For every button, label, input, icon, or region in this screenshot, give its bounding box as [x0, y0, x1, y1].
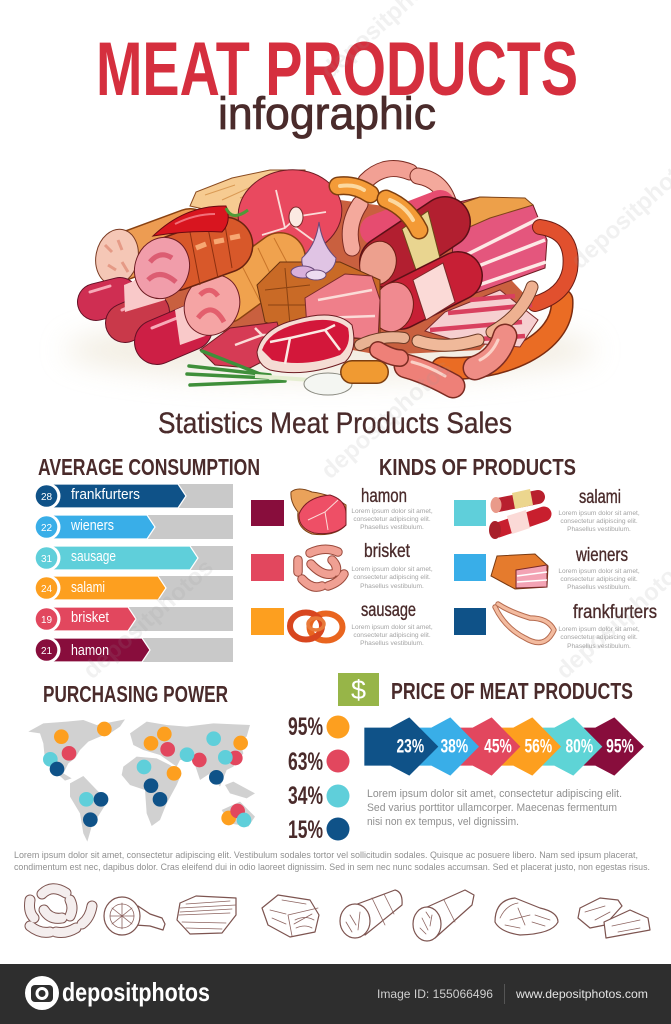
pink steak [233, 163, 347, 263]
price values: 45% [484, 737, 512, 758]
text block: price description: nisi non ex tempus, vel dignissim. [367, 816, 519, 828]
sketch: meat chunk [262, 895, 319, 937]
image id: Image ID: 155066496 [377, 987, 493, 1001]
item: frankfurters: consectetur adipiscing elit. [560, 634, 638, 641]
item: frankfurters [454, 602, 657, 650]
bar: frankfurters: frankfurters [71, 486, 140, 503]
watermark: depositphotos [316, 354, 457, 484]
bar: brisket: brisket [71, 609, 110, 626]
panel: kinds of products legend [251, 486, 657, 650]
map: teal dots [43, 731, 251, 827]
bar: frankfurters [34, 483, 233, 509]
bar: wieners [34, 514, 233, 540]
website: www.depositphotos.com [515, 987, 648, 1001]
icon: dollar sign [338, 673, 379, 706]
sketch: sausage links [30, 889, 92, 932]
bar: salami [34, 575, 233, 601]
item: sausage: Phasellus vestibulum. [360, 640, 424, 647]
front sausages [352, 287, 532, 386]
price values: 95% [606, 737, 634, 758]
red right sausage [535, 227, 571, 304]
bar: sausage [34, 545, 233, 571]
price values: 23% [396, 737, 424, 758]
bar: hamon [34, 637, 233, 663]
item: frankfurters: frankfurters [573, 602, 657, 623]
price values: 56% [524, 737, 552, 758]
legend: purchasing power percentages: 63% [288, 748, 323, 776]
sketch: steak [495, 898, 558, 935]
map: navy dots [50, 762, 224, 827]
bar: hamon: 21 [41, 646, 52, 657]
left orange roll [122, 232, 190, 257]
brisket block [257, 262, 380, 340]
garlic [302, 222, 336, 276]
item: hamon: hamon [361, 486, 407, 507]
item: salami [454, 487, 640, 539]
item: sausage: Lorem ipsum dolor sit amet, [351, 624, 433, 631]
orange sausages [338, 186, 419, 230]
bar: hamon: hamon [71, 642, 109, 659]
bar: sausage: sausage [71, 548, 116, 565]
map: orange dots [54, 722, 248, 825]
sketch: drumsticks [578, 898, 650, 938]
map: red dots [62, 742, 245, 818]
hero illustration: pile of meat products [65, 163, 595, 395]
sketch: salami [413, 890, 474, 941]
sausage 2 [175, 245, 225, 263]
chart: price arrows [364, 717, 644, 776]
icon: depositphotos logo [25, 976, 59, 1010]
legend: purchasing power percentages: 34% [288, 782, 323, 810]
item: salami: Phasellus vestibulum. [567, 526, 631, 533]
back pink sausages [350, 169, 449, 248]
bar: salami: salami [71, 579, 105, 596]
item: brisket [251, 541, 433, 590]
chart: average consumption bars [34, 483, 233, 663]
item: brisket: Lorem ipsum dolor sit amet, [351, 566, 433, 573]
bar: salami: 24 [41, 584, 52, 595]
item: wieners: consectetur adipiscing elit. [560, 576, 638, 583]
legend: purchasing power percentages: 15% [288, 816, 323, 844]
bar: wieners: wieners [70, 517, 114, 534]
text block: paragraph: Lorem ipsum dolor sit amet, consectetur adipiscing elit. Vestibulum sodales tortor vel sollicitudin sodales. Quisque ac posuere libero. Nam sed ipsum placerat, [14, 850, 638, 860]
legend: purchasing power percentages [288, 713, 350, 844]
bar: brisket [34, 606, 233, 632]
title: infographic [218, 88, 436, 139]
text block: price description: Lorem ipsum dolor sit amet, consectetur adipiscing elit. [367, 788, 622, 800]
sketch: salami roll [340, 890, 402, 938]
rear steak [200, 322, 285, 368]
legend: purchasing power percentages: 95% [288, 713, 323, 741]
icon: dollar sign: $ [351, 675, 366, 705]
item: sausage [251, 600, 433, 647]
world map with dots [28, 719, 255, 842]
item: wieners: Lorem ipsum dolor sit amet, [558, 568, 640, 575]
map: continents [28, 719, 255, 842]
heading: average consumption: AVERAGE CONSUMPTION [38, 454, 260, 480]
item: frankfurters: Phasellus vestibulum. [567, 643, 631, 650]
item: brisket: brisket [364, 541, 411, 562]
text block: paragraph [14, 850, 650, 872]
sketch icons row [30, 889, 650, 941]
logo wordmark: depositphotos [62, 977, 210, 1007]
bar: wieners: 22 [41, 523, 52, 534]
title [96, 27, 578, 139]
item: salami: salami [579, 487, 621, 508]
fat piece [190, 170, 310, 215]
orange ring [442, 300, 562, 368]
item: brisket: consectetur adipiscing elit. [353, 574, 431, 581]
item: wieners [454, 545, 640, 591]
salami upper [375, 205, 440, 230]
price values [396, 737, 634, 758]
price values: 38% [440, 737, 468, 758]
red sticks [90, 286, 190, 342]
heading: purchasing power: PURCHASING POWER [43, 681, 228, 707]
item: hamon: Lorem ipsum dolor sit amet, [351, 508, 433, 515]
item: salami: Lorem ipsum dolor sit amet, [558, 510, 640, 517]
heading: kinds of products: KINDS OF PRODUCTS [379, 454, 576, 480]
sketch: bacon [177, 896, 236, 934]
bar: frankfurters: 28 [41, 492, 52, 503]
item: wieners: Phasellus vestibulum. [567, 584, 631, 591]
front steak [257, 315, 354, 373]
text block: price description: Sed varius porttitor ullamcorper. Maecenas fermentum [367, 802, 617, 814]
sausage 3 [225, 258, 280, 298]
price values: 80% [565, 737, 593, 758]
text block: paragraph: condimentum est nec, dapibus dolor. Cras eleifend dui in odio laoreet dignissim. Sed in sem nec nunc sodales accumsan. Sed et placerat justo, non egestas risus. [14, 862, 650, 872]
footer bar [0, 964, 671, 1024]
item: hamon [251, 486, 433, 535]
salami lower [400, 276, 458, 305]
bacon slab [452, 197, 547, 297]
item: salami: consectetur adipiscing elit. [560, 518, 638, 525]
subtitle: Statistics Meat Products Sales [158, 407, 512, 440]
item: wieners: wieners [575, 545, 628, 566]
item: frankfurters: Lorem ipsum dolor sit amet, [558, 626, 640, 633]
bar: sausage: 31 [41, 554, 52, 565]
bar: brisket: 19 [41, 615, 52, 626]
lower bacon slices [425, 290, 538, 347]
text block: price description [367, 788, 622, 828]
sketch: ham [104, 897, 165, 935]
chili [153, 206, 228, 236]
item: sausage: consectetur adipiscing elit. [353, 632, 431, 639]
watermark [78, 0, 671, 684]
item: brisket: Phasellus vestibulum. [360, 583, 424, 590]
item: sausage: sausage [361, 600, 416, 621]
green onion [187, 351, 285, 385]
item: hamon: consectetur adipiscing elit. [353, 516, 431, 523]
watermark: depositphotos [78, 554, 219, 684]
item: hamon: Phasellus vestibulum. [360, 524, 424, 531]
